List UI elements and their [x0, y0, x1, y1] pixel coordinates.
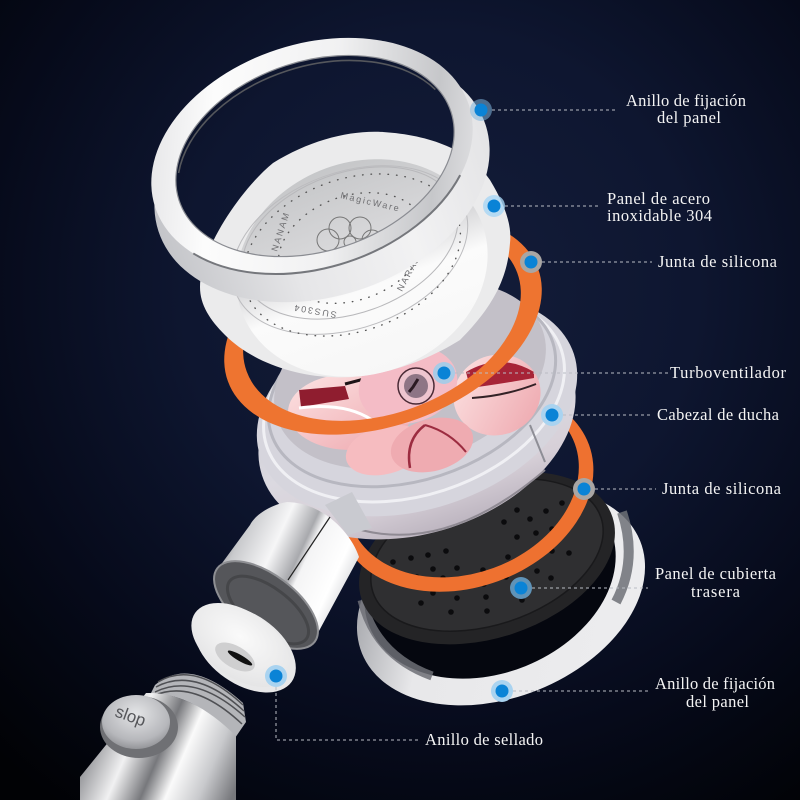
label: junta de silicona: Junta de silicona	[658, 252, 778, 271]
stop button: slop	[113, 702, 148, 730]
back cover panel (black disc)	[337, 441, 637, 675]
fan hub	[350, 335, 466, 435]
callout: rear ring	[491, 674, 775, 711]
label: anillo de sellado: Anillo de sellado	[425, 730, 543, 749]
top fixing ring	[120, 0, 522, 343]
panel engraved text: SUS304	[292, 302, 337, 320]
stop button	[100, 695, 178, 758]
sealing ring	[176, 586, 312, 710]
callout: sealing ring	[265, 665, 543, 749]
label: panel de cubierta: Panel de cubierta	[655, 564, 777, 583]
shower arm nut	[199, 502, 359, 666]
label: panel de cubierta: trasera	[691, 582, 741, 601]
turbo fan	[288, 335, 552, 484]
upper orange silicone gasket	[194, 175, 572, 475]
handle	[80, 673, 246, 800]
panel engraved text	[269, 190, 423, 320]
label: anillo de fijación inferior: Anillo de fijación	[655, 674, 775, 693]
label: anillo de fijación inferior	[655, 674, 775, 711]
panel engraved text: NARAN	[395, 252, 423, 293]
callout: upper gasket	[520, 251, 778, 273]
label: turboventilador: Turboventilador	[670, 363, 786, 382]
label: anillo de fijación: Anillo de fijación	[626, 91, 746, 110]
callout: shower head	[541, 404, 780, 426]
fan blade: right	[442, 342, 552, 448]
callout: turbo fan	[433, 362, 786, 384]
handle body	[80, 693, 236, 800]
lower orange silicone gasket	[308, 354, 622, 626]
callout: lower gasket	[573, 478, 782, 500]
fan blade: bottom	[340, 409, 479, 484]
handle thread	[150, 673, 246, 738]
panel engraved text: MagicWare	[340, 190, 402, 214]
panel flower emblem	[317, 217, 382, 251]
callout: ring top	[470, 91, 746, 127]
stainless steel panel	[200, 125, 519, 411]
fan blade: left	[288, 374, 412, 450]
callout: steel panel	[483, 189, 712, 225]
label: panel de acero	[607, 189, 712, 225]
label: anillo de fijación: del panel	[657, 108, 721, 127]
label: panel de acero: inoxidable 304	[607, 206, 712, 225]
panel engraved text: NANAM	[269, 210, 292, 253]
callout: back cover	[510, 564, 777, 601]
label: anillo de fijación inferior: del panel	[686, 692, 749, 711]
label: panel de cubierta	[655, 564, 777, 601]
shower head transparent body	[228, 248, 606, 578]
label: junta de silicona inferior: Junta de silicona	[662, 479, 782, 498]
label: panel de acero: Panel de acero	[607, 189, 710, 208]
label: anillo de fijación	[626, 91, 746, 127]
rear fixing ring	[324, 441, 678, 746]
label: cabezal de ducha: Cabezal de ducha	[657, 405, 780, 424]
